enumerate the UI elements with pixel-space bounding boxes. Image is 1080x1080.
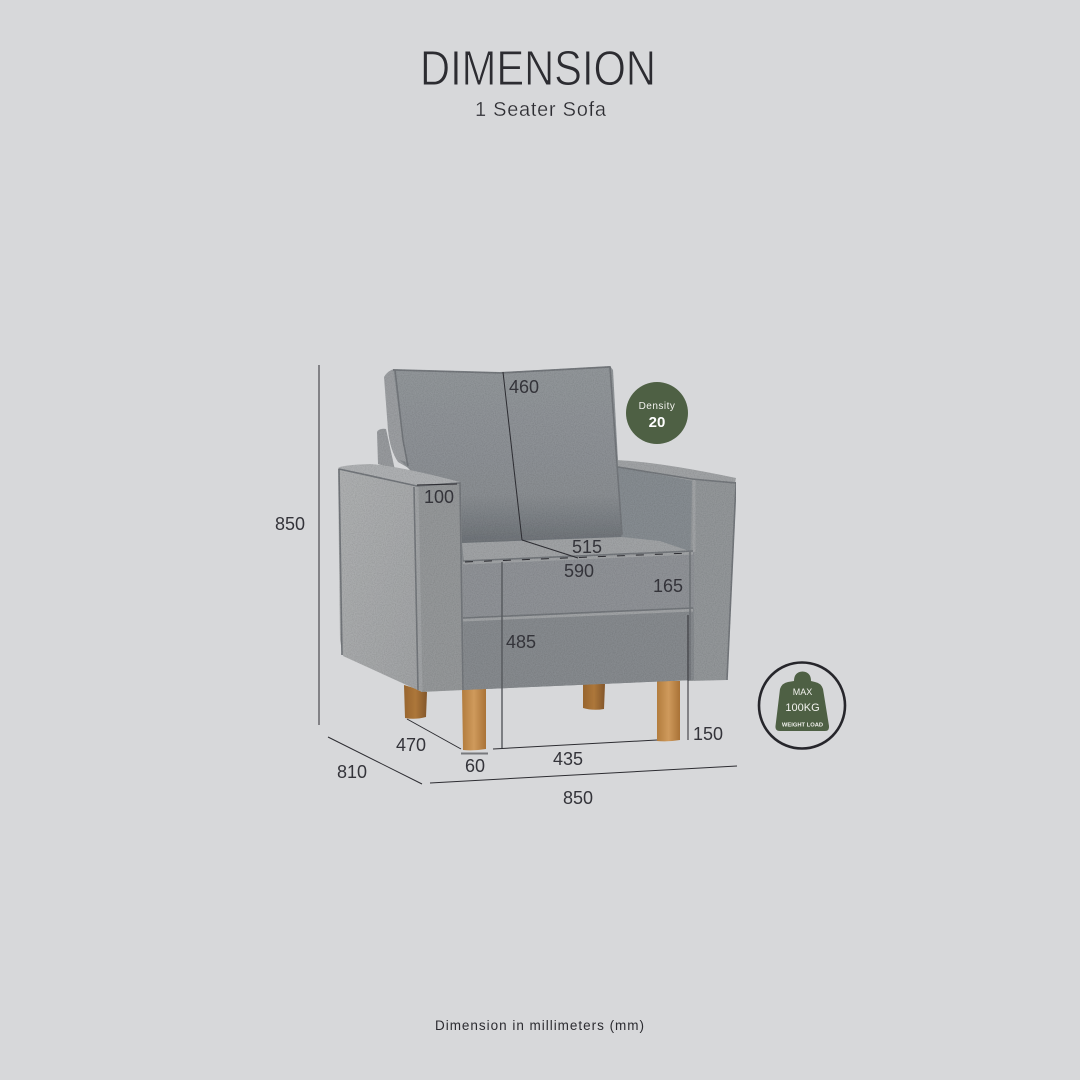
dimension labels: 590 bbox=[564, 561, 594, 581]
back legs bbox=[404, 684, 605, 719]
subtitle: 1 Seater Sofa bbox=[475, 99, 607, 121]
seat front line bbox=[465, 553, 690, 562]
dimension labels: 60 bbox=[465, 756, 485, 776]
light piping bbox=[417, 480, 694, 690]
seat top bbox=[462, 537, 695, 563]
density badge: Density bbox=[639, 401, 675, 412]
right arm inner bbox=[617, 466, 694, 553]
footnote: Dimension in millimeters (mm) bbox=[435, 1018, 644, 1033]
dimension labels: 165 bbox=[653, 576, 683, 596]
dimension labels: 485 bbox=[506, 632, 536, 652]
dimension lines bbox=[319, 365, 737, 784]
overall depth line bbox=[328, 737, 422, 784]
weight load badge bbox=[759, 662, 845, 748]
sofa rear frame bbox=[377, 429, 395, 470]
back cushion side bbox=[384, 369, 412, 470]
seat cushion front bbox=[462, 551, 694, 620]
density badge: 20 bbox=[649, 414, 665, 431]
front legs bbox=[462, 681, 680, 750]
dimension labels: 435 bbox=[553, 749, 583, 769]
upholstery bbox=[338, 366, 736, 692]
overall width line bbox=[430, 766, 737, 783]
back cushion bbox=[393, 366, 622, 544]
dimension labels: 850 bbox=[275, 514, 305, 534]
weight load badge: WEIGHT LOAD bbox=[782, 722, 823, 728]
seat base front bbox=[462, 608, 694, 690]
title: DIMENSION bbox=[420, 42, 656, 96]
sofa illustration bbox=[338, 366, 736, 750]
overall height line bbox=[318, 365, 320, 725]
back height line bbox=[503, 372, 522, 540]
inner leg span line bbox=[493, 740, 657, 749]
seat width line bbox=[522, 540, 578, 558]
seat height line bbox=[501, 562, 503, 748]
dimension labels: 515 bbox=[572, 537, 602, 557]
dimension labels: 470 bbox=[396, 735, 426, 755]
dimension labels: 810 bbox=[337, 762, 367, 782]
seat depth line bbox=[407, 719, 461, 749]
dimension labels: 100 bbox=[424, 487, 454, 507]
weight load badge: MAX bbox=[793, 687, 812, 697]
body base fill bbox=[400, 460, 694, 690]
dimension labels bbox=[275, 377, 723, 808]
left arm side bbox=[338, 468, 422, 692]
icon: weight bbox=[775, 672, 829, 731]
density badge bbox=[626, 382, 688, 444]
dimension labels: 150 bbox=[693, 724, 723, 744]
dimension labels: 460 bbox=[509, 377, 539, 397]
right arm top bbox=[616, 460, 736, 483]
leg width line bbox=[461, 752, 488, 754]
left arm top bbox=[338, 464, 460, 486]
leg height line bbox=[687, 615, 689, 740]
piping seams bbox=[339, 367, 736, 690]
dimension labels: 850 bbox=[563, 788, 593, 808]
left arm front bbox=[416, 482, 464, 692]
arm width line bbox=[417, 484, 457, 485]
right arm front bbox=[688, 479, 736, 681]
weight load badge: 100KG bbox=[785, 702, 820, 714]
